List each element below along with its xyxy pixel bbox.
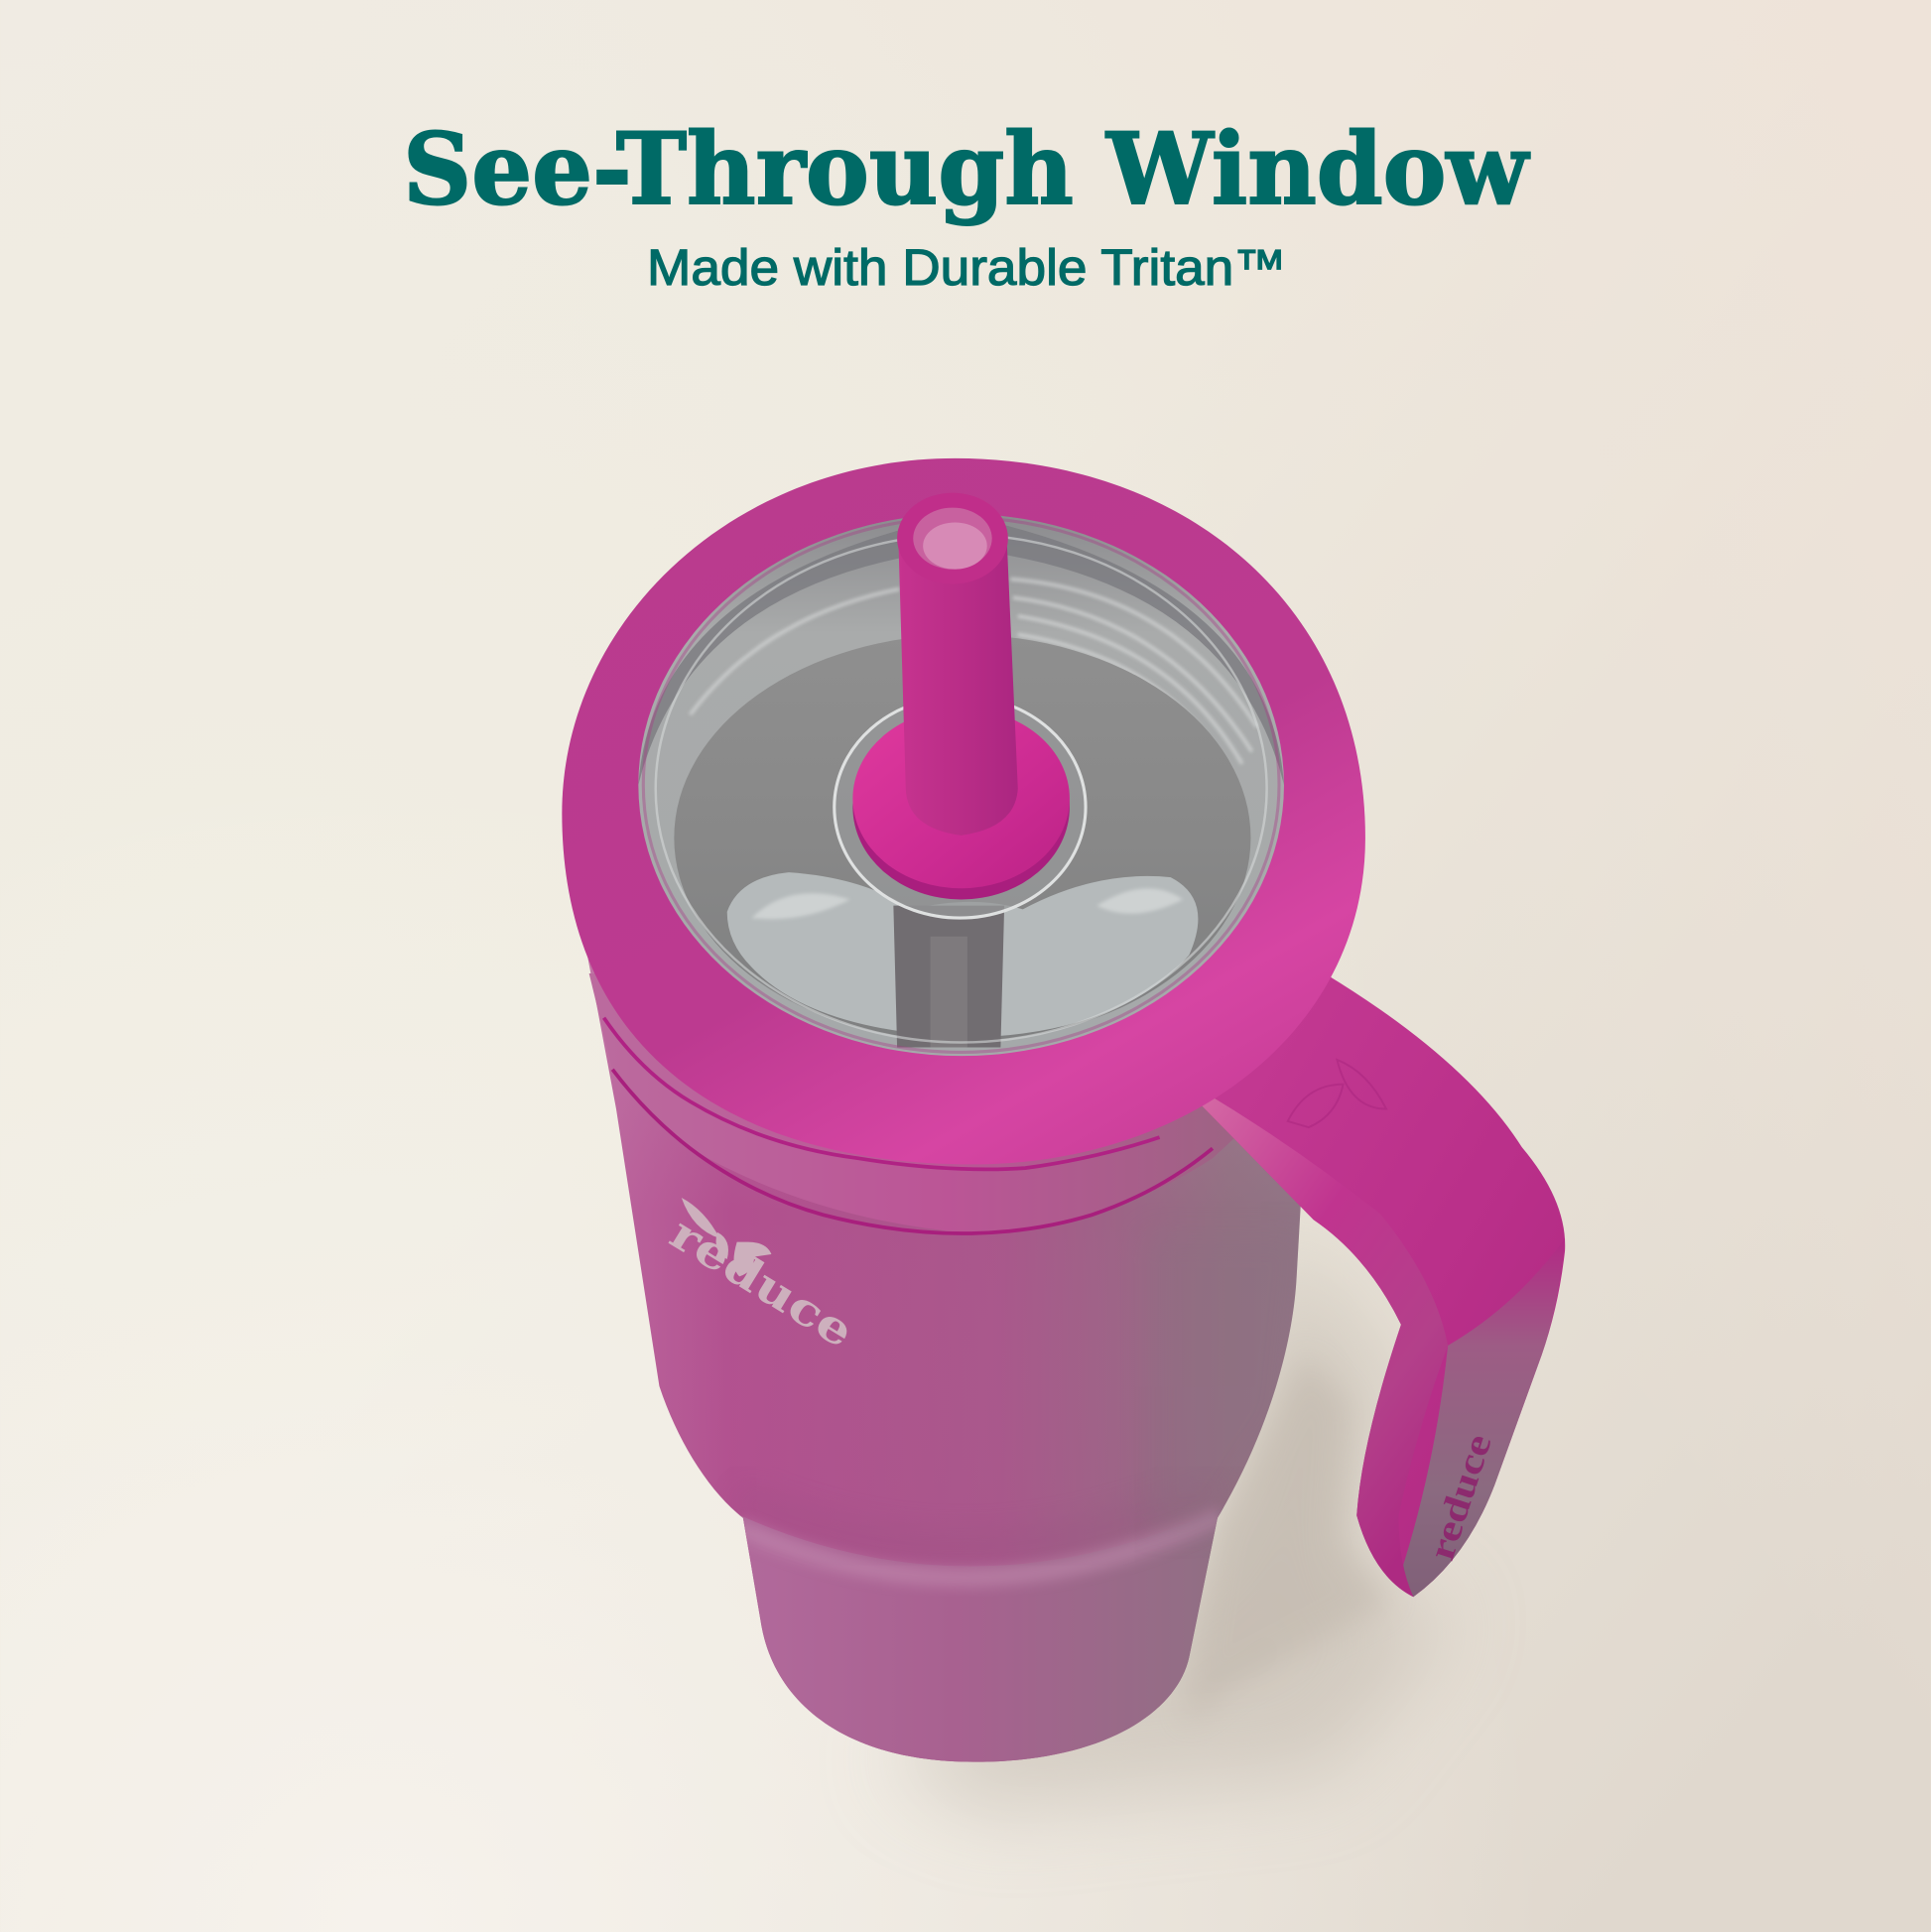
- leaf logo: [682, 1198, 771, 1276]
- title: See-Through Window: [403, 112, 1530, 227]
- handle leaf emboss: [1288, 1060, 1386, 1127]
- white reflection: [727, 872, 1198, 1038]
- lower section of body: [727, 1232, 1306, 1774]
- interior floor: [674, 634, 1250, 1041]
- thread ridges: [690, 580, 1257, 776]
- window rim: [656, 535, 1267, 1042]
- see-through window: [638, 514, 1284, 1056]
- brand mark on body: [661, 1198, 863, 1358]
- straw shadow in floor: [893, 906, 1004, 1047]
- tumbler body: [579, 912, 1344, 1774]
- subtitle: Made with Durable Tritan™: [647, 239, 1286, 296]
- handle inner side face: [1199, 1095, 1448, 1597]
- straw: [897, 493, 1018, 836]
- neck band under lid: [589, 962, 1306, 1233]
- straw seal: [835, 697, 1086, 918]
- handle: [1199, 973, 1565, 1597]
- cup cast shadow: [887, 1232, 1454, 1811]
- brand name: reduce: [661, 1207, 863, 1358]
- lid ring: [562, 458, 1365, 1164]
- handle brand name: reduce: [1421, 1430, 1500, 1565]
- handle back face: [1398, 1238, 1565, 1597]
- dark upper glass: [638, 515, 1284, 785]
